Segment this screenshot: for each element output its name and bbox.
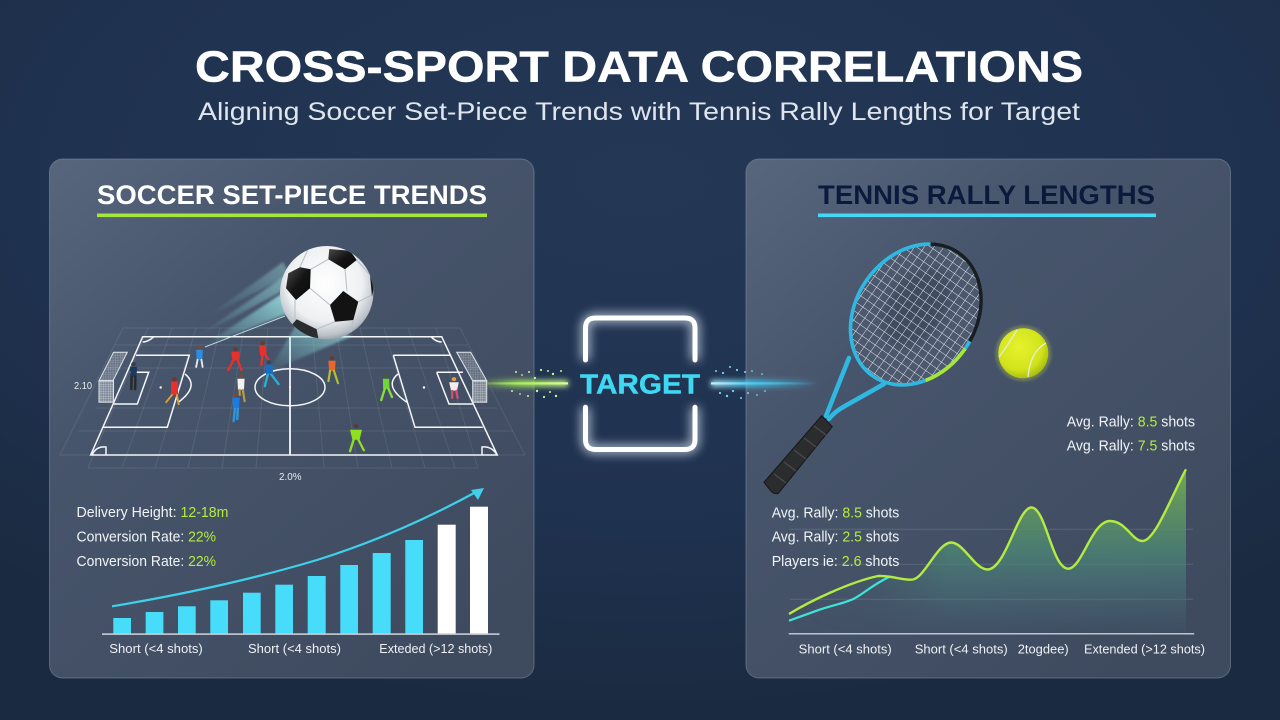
target connector: blue beam [711, 366, 817, 399]
pitch label: bottom: 2.0% [279, 472, 302, 483]
panel background: soccer [50, 159, 534, 678]
center and penalty spots [160, 386, 425, 389]
icon: soccer ball [280, 245, 374, 339]
pitch lines [91, 337, 497, 455]
stat: players: Players ie: 2.6 shots [772, 554, 899, 570]
racket handle [764, 416, 832, 494]
axis labels [799, 641, 1205, 656]
ball motion trail [195, 262, 352, 372]
target brackets [586, 318, 695, 450]
stat: conversion rate 1: Conversion Rate: 22% [76, 530, 216, 546]
player: red upper [259, 341, 270, 365]
axis label 3: Exteded (>12 shots) [379, 641, 492, 656]
title: CROSS-SPORT DATA CORRELATIONS [195, 42, 1083, 92]
stat: avg rally 8.5 lower: Avg. Rally: 8.5 shots [772, 506, 899, 522]
axis label 4: Extended (>12 shots) [1084, 641, 1205, 656]
heading underline: soccer [97, 214, 487, 217]
stat text: tennis lower [772, 506, 899, 570]
stat: conversion rate 2: Conversion Rate: 22% [76, 554, 216, 570]
stat: delivery height: Delivery Height: 12-18m [76, 505, 228, 521]
player: green [381, 374, 392, 400]
trend arrow [112, 488, 484, 606]
axis label 1: Short (<4 shots) [109, 641, 203, 656]
target label: TARGET [580, 368, 700, 400]
axis label 3: 2togdee) [1018, 641, 1069, 656]
axis label 2: Short (<4 shots) [915, 641, 1008, 656]
player: dark goalkeeper [130, 362, 137, 389]
player: blue [196, 345, 203, 367]
players [130, 341, 459, 451]
target bracket glow [586, 318, 695, 450]
player: blue lower [232, 393, 240, 421]
stat text: soccer [76, 505, 228, 570]
subtitle: Aligning Soccer Set-Piece Trends with Tennis Rally Lengths for Target [198, 98, 1080, 126]
target icon [580, 318, 700, 450]
panel: soccer set-piece trends [50, 159, 534, 678]
stat text: tennis upper [1067, 415, 1195, 454]
axis label 1: Short (<4 shots) [799, 641, 892, 656]
right goal [457, 352, 487, 402]
target connector: green beam [487, 369, 568, 398]
lime line [789, 469, 1186, 614]
pitch label: left: 2.10 [74, 381, 92, 392]
bar chart: soccer [102, 488, 500, 656]
panel: tennis rally lengths [746, 159, 1230, 678]
stat: avg rally 2.5: Avg. Rally: 2.5 shots [772, 530, 899, 546]
player: blue centre [265, 360, 279, 386]
left goal [99, 352, 127, 402]
player: white goalkeeper [449, 377, 459, 398]
heading: tennis: TENNIS RALLY LENGTHS [818, 180, 1155, 210]
bars [113, 507, 488, 634]
pitch perspective grid [60, 328, 525, 468]
line chart: tennis [789, 469, 1205, 656]
soccer pitch diagram [60, 328, 525, 483]
stat: avg rally 8.5: Avg. Rally: 8.5 shots [1067, 415, 1195, 431]
player: lime [350, 424, 364, 451]
player: red left [166, 377, 179, 404]
player: red centre [228, 347, 242, 370]
icon: tennis racket [764, 219, 1008, 494]
axis label 2: Short (<4 shots) [248, 641, 341, 656]
heading: soccer: SOCCER SET-PIECE TRENDS [97, 180, 487, 210]
racket head [824, 219, 1008, 410]
player: orange [328, 356, 338, 383]
chart baseline [789, 633, 1194, 634]
player: white [237, 374, 245, 401]
axis labels [109, 641, 492, 656]
chart baseline [102, 633, 500, 635]
cyan line [789, 577, 890, 621]
icon: tennis ball [995, 325, 1051, 381]
heading underline: tennis [818, 214, 1156, 217]
racket throat [826, 358, 884, 419]
chart grid lines [790, 529, 1193, 599]
stat: avg rally 7.5: Avg. Rally: 7.5 shots [1067, 438, 1195, 454]
panel background: tennis [746, 159, 1230, 678]
area fill [872, 472, 1186, 620]
